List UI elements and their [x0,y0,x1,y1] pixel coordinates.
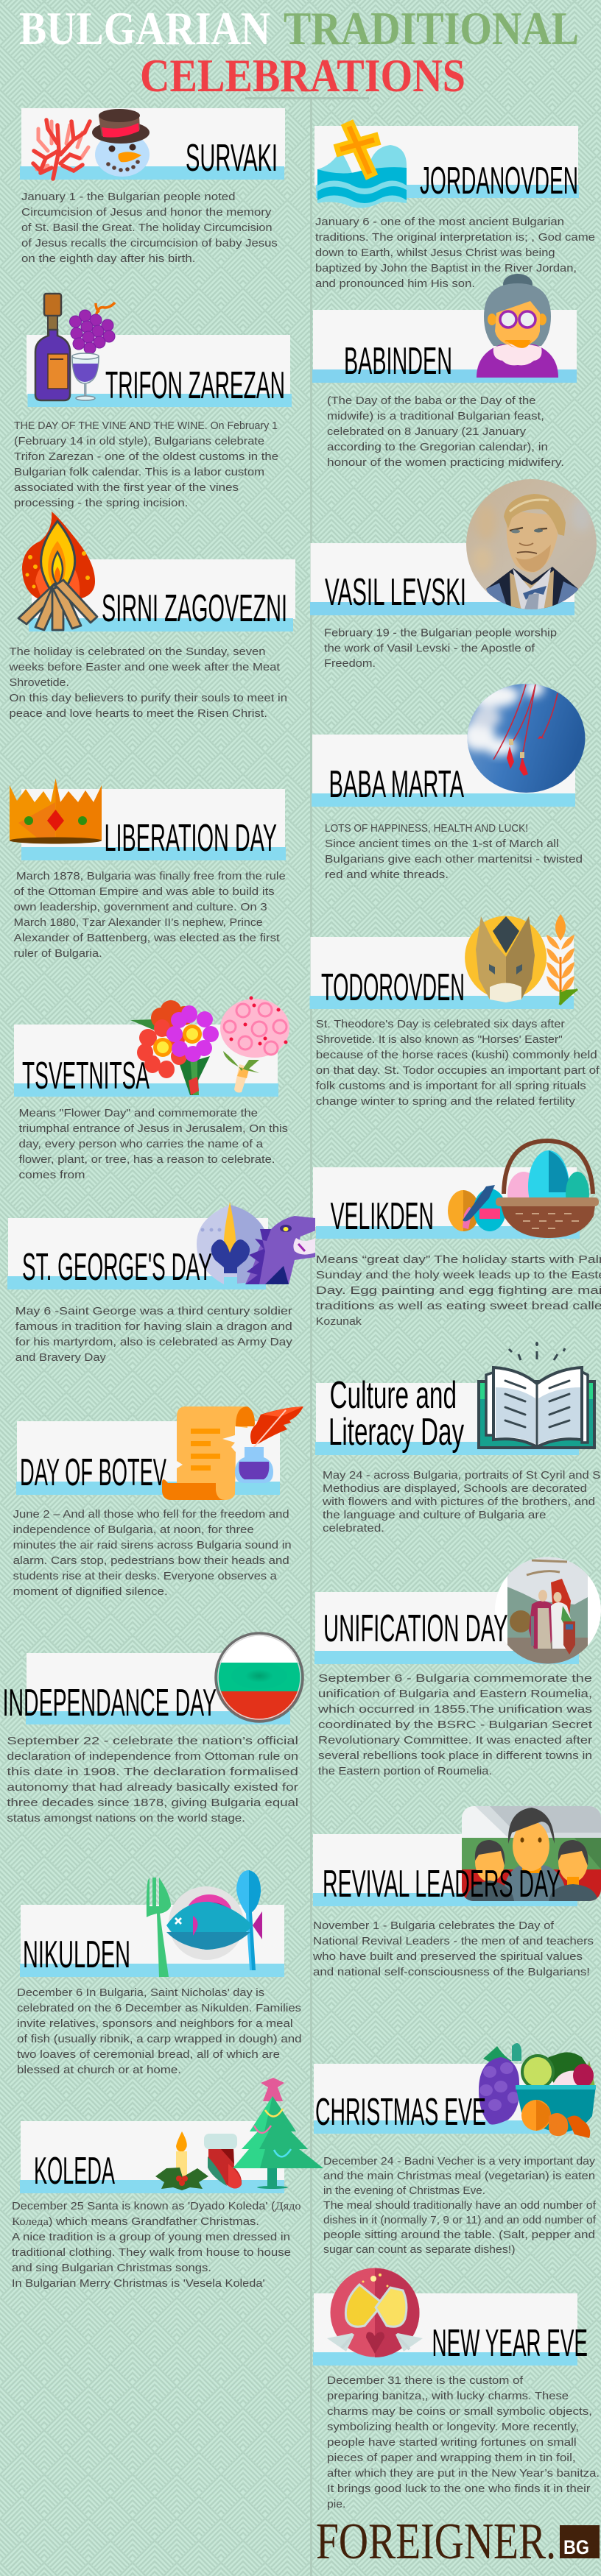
panel: day of botev [13,1406,303,1598]
text block: jordanovden: baptized by John the Baptist in the River Jordan, [315,262,577,275]
heading: day of botev: DAY OF BOTEV [20,1451,166,1494]
text block: new year eve: charms may be coins or small symbolic objects, [327,2405,592,2418]
text block: velikden: Day. Egg painting and egg fighting are main [316,1284,601,1297]
text block: todorovden: on that day. St. Todor occupies an important part of [316,1064,600,1077]
icon: quill and inkwell [235,1406,303,1483]
text block: day of botev: June 2 – And all those who fell for the freedom and [13,1508,289,1521]
text block: todorovden: change winter to spring and the related fertility [316,1095,575,1108]
text block: todorovden [316,1018,600,1108]
text block: jordanovden: and pronounced him His son. [315,277,475,290]
panel: revival leaders day [312,1806,601,1978]
text block: baba marta: red and white threads. [325,868,449,881]
panel: christmas eve [314,2043,597,2256]
text block: new year eve: symbolizing health or longevity. More recently, [327,2421,579,2433]
text block: trifon zarezan: (February 14 in old style), Bulgarians celebrate [14,435,264,447]
text block: survaki: Circumcision of Jesus and honor the memory [21,206,272,219]
text block: koleda: A nice tradition is a group of young men dressed in [12,2231,290,2243]
icon: painted eggs [448,1185,506,1231]
panel: sirni zagovezni [8,512,295,720]
text block: trifon zarezan: THE DAY OF THE VINE AND THE WINE. On February 1 [14,420,278,432]
panel: culture and literacy day [315,1342,601,1535]
text block: new year eve: preparing banitza,, with lucky charms. These [327,2390,569,2402]
icon: coral [33,120,90,179]
icon: scroll [162,1406,255,1500]
text block: velikden: Kozunak [316,1315,362,1328]
text block: tsvetnitsa: day, every person who carries the name of a [19,1138,264,1150]
text block: trifon zarezan: Bulgarian folk calendar. This is a labor custom [14,466,264,478]
heading: velikden: VELIKDEN [331,1195,434,1238]
text block: unification day: unification of Bulgaria and Eastern Roumelia, [318,1688,592,1700]
text block: todorovden: St. Theodore's Day is celebrated six days after [316,1018,565,1030]
heading: nikulden: NIKULDEN [23,1933,130,1976]
text block: unification day [317,1672,593,1777]
text block: tsvetnitsa: comes from [19,1169,85,1181]
panel: unification day [314,1557,601,1777]
heading: sirni zagovezni: SIRNI ZAGOVEZNI [102,587,287,630]
text block: revival leaders day: who have built and preserved the spiritual values [312,1950,583,1963]
text block: koleda: In Bulgarian Merry Christmas is 'Vesela Koleda' [12,2277,265,2290]
text block: survaki: on the eighth day after his birth. [21,252,195,265]
text block: koleda [12,2200,300,2290]
text block: trifon zarezan [14,420,278,509]
text block: todorovden: Shrovetide. It is also known as "Horses' Easter" [316,1033,563,1046]
panel: koleda [12,2078,323,2290]
text block: liberation day: of the Ottoman Empire and was able to build its [14,885,275,898]
text block: st george's day: May 6 -Saint George was a third century soldier [15,1305,292,1317]
text block: christmas eve [323,2155,597,2256]
text block: independance day: this date in 1908. The declaration formalised [7,1766,298,1778]
icon: bonfire [18,512,97,630]
text block: babinden: celebrated on 8 January (21 January [327,425,527,438]
panel: st george's day [7,1202,315,1364]
text block: nikulden: invite relatives, sponsors and neighbors for a meal [17,2017,293,2030]
text block: st george's day [15,1305,292,1364]
icon: wine bottle [35,294,70,400]
text block: baba marta [325,822,583,881]
text block: unification day: several rebellions took place in different towns in [318,1749,592,1762]
text block: tsvetnitsa: flower, plant, or tree, has a reason to celebrate. [19,1153,275,1166]
heading: baba marta: BABA MARTA [328,763,464,806]
icon: wheat [546,914,577,1005]
icon: wine glass [72,353,99,400]
text block: culture and literacy day: with flowers and with pictures of the brothers, and [322,1496,595,1508]
panel: trifon zarezan [14,294,292,509]
text block: koleda: December 25 Santa is known as 'Dyado Koleda' ( Дядо [12,2200,300,2212]
text block: todorovden: folk customs and is important for all spring rituals [316,1080,586,1092]
icon: open book [479,1342,594,1448]
text block: sirni zagovezni: weeks before Easter and one week after the Meat [8,661,281,673]
text block: nikulden [17,1986,302,2076]
icon: martenitsa photo [467,684,585,793]
text block: independance day: three decades since 1878, giving Bulgaria equal [7,1797,298,1809]
icon: champagne glasses [327,2268,423,2357]
panel: babinden [312,274,577,469]
text block: independance day [7,1735,298,1825]
text block: day of botev [13,1508,292,1598]
icon: bulgarian flag badge [214,1631,305,1724]
icon: grapes and vegetable bowl [479,2043,596,2138]
panel: vasil levski [310,478,600,670]
icon: flower bouquets [130,997,289,1095]
icon: crown [10,779,102,843]
text block: sirni zagovezni: On this day believers to purify their souls to meet in [9,692,287,704]
text block: babinden: (The Day of the baba or the Day of the [327,394,536,407]
panel: jordanovden [314,122,595,290]
icon: knight helmet [197,1202,264,1284]
heading: survaki: SURVAKI [186,137,278,180]
logo: foreigner.bg: BG [563,2536,589,2558]
text block: revival leaders day: National Revival Leaders - the men of and teachers [313,1935,594,1947]
text block: todorovden: because of the horse races (kushi) commonly held [316,1049,597,1061]
text block: survaki [21,191,278,265]
text block: day of botev: students rise at their desks. Everyone observes a [13,1570,277,1582]
text block: culture and literacy day: celebrated. [323,1522,384,1535]
text block: velikden: traditions as well as eating sweet bread called [316,1300,601,1312]
text block: koleda: traditional clothing. They walk from house to house [12,2246,291,2259]
text block: vasil levski [324,627,557,670]
icon: grapes [69,302,115,354]
heading: independance day: INDEPENDANCE DAY [3,1682,217,1724]
text block: liberation day: March 1878, Bulgaria was finally free from the rule [16,870,286,882]
panel: nikulden [17,1870,302,2076]
text block: baba marta: Since ancient times on the 1-st of March all [325,838,559,850]
panel: tsvetnitsa [14,997,289,1181]
icon: egg basket [496,1141,599,1238]
text block: liberation day: own leadership, government and culture. On 3 [14,901,267,913]
text block: culture and literacy day: Methodius are displayed, Schools are decorated [323,1482,587,1495]
text block: survaki: January 1 - the Bulgarian people noted [21,191,236,203]
heading: koleda: KOLEDA [34,2150,115,2193]
text block: christmas eve: in the evening of Christmas Eve. [323,2184,485,2197]
heading: vasil levski: VASIL LEVSKI [325,571,466,614]
icon: fish on a plate with cutlery [147,1870,262,1977]
text block: independance day: autonomy that had already basically existed for [7,1781,298,1794]
icon: dragon [245,1216,315,1284]
text block: new year eve: people have started writing fortunes on small [327,2436,577,2449]
text block: velikden: Sunday and the holy week leads up to the Easter [316,1269,601,1281]
text block: trifon zarezan: Trifon Zarezan - one of the oldest customs in the [14,450,278,463]
text block: jordanovden [315,216,595,290]
text block: koleda: Коледа ) which means Grandfather Christmas. [12,2215,259,2228]
title: CELEBRATIONS [140,50,465,102]
text block: christmas eve: sugar can count as separate dishes!) [323,2243,516,2256]
text block: liberation day [14,870,286,960]
text block: day of botev: alarm. Cars stop, pedestrians bow their heads and [13,1554,289,1567]
panel: velikden [313,1141,601,1328]
text block: nikulden: blessed at church or at home. [17,2064,181,2076]
text block: velikden: Means “great day” The holiday starts with Palm [316,1253,601,1266]
text block: unification day: coordinated by the BSRC - Bulgarian Secret [318,1719,593,1731]
text block: independance day: status amongst nations on the world stage. [7,1812,245,1825]
text block: christmas eve: people sitting around the table. (Salt, pepper and [323,2229,595,2241]
text block: revival leaders day: November 1 - Bulgaria celebrates the Day of [313,1919,555,1932]
text block: vasil levski: February 19 - the Bulgarian people worship [324,627,557,639]
panel: todorovden [309,914,600,1108]
text block: trifon zarezan: associated with the first year of the vines [14,481,239,494]
text block: velikden [316,1253,601,1328]
text block: baba marta: Bulgarians give each other martenitsi - twisted [325,853,583,866]
text block: culture and literacy day: the language and culture of Bulgaria are [323,1509,546,1521]
heading: culture and literacy day [328,1374,464,1454]
text block: independance day: declaration of independence from Ottoman rule on [7,1750,298,1763]
text block: trifon zarezan: processing - the spring incision. [14,497,189,509]
panel: liberation day [10,779,286,960]
text block: sirni zagovezni [8,645,287,720]
text block: babinden: midwife) is a traditional Bulgarian feast, [327,410,544,422]
text block: koleda: and sing Bulgarian Christmas songs. [12,2262,211,2274]
heading: tsvetnitsa: TSVETNITSA [22,1055,150,1097]
text block: babinden: according to the Gregorian calendar), in [327,441,548,453]
text block: unification day: the Eastern portion of Roumelia. [318,1765,492,1777]
text block: vasil levski: Freedom. [324,657,376,670]
heading: todorovden: TODOROVDEN [321,966,465,1009]
text block: day of botev: independence of Bulgaria, at noon, for three [13,1524,254,1536]
icon: revival leaders on flag [462,1806,601,1901]
text block: nikulden: of fish (usually ribnik, a carp wrapped in dough) and [17,2033,302,2045]
title [19,3,579,102]
text block: christmas eve: December 24 - Badni Vecher is a very important day [323,2155,596,2168]
text block: liberation day: March 1880, Tzar Alexander II’s nephew, Prince [14,916,263,929]
heading: culture and literacy day: Literacy Day [328,1411,464,1454]
text block: tsvetnitsa [19,1107,288,1181]
heading: trifon zarezan: TRIFON ZAREZAN [105,364,285,407]
text block: jordanovden: traditions. The original interpretation is; , God came [315,231,595,244]
text block: nikulden: two loaves of ceremonial bread, all of which are [17,2048,280,2061]
text block: new year eve: pieces of paper and wrapping them in tin foil, [327,2452,576,2464]
heading: babinden: BABINDEN [344,340,452,383]
icon: cross in waves [317,122,407,208]
panel: baba marta [312,679,589,881]
text block: new year eve [327,2374,600,2510]
text block: unification day: September 6 - Bulgaria commemorate the [318,1672,592,1685]
text block: unification day: which occurred in 1855.The unification was [317,1703,592,1716]
text block: day of botev: minutes the air raid sirens across Bulgaria sound in [13,1539,292,1551]
text block: survaki: of Jesus recalls the circumcision of baby Jesus [21,237,278,250]
text block: survaki: of St. Basil the Great. The holiday Circumcision [21,222,273,234]
text block: st george's day: for his martyrdom, also is celebrated as Army Day [15,1336,292,1348]
text block: babinden: honour of the women practicing midwifery. [327,456,564,469]
text block: new year eve: It brings good luck to the one who finds it in their [327,2483,590,2495]
text block: sirni zagovezni: Shrovetide. [9,676,69,689]
text block: new year eve: pie. [327,2498,345,2510]
icon: snowman [92,109,150,177]
text block: st george's day: famous in tradition for having slain a dragon and [15,1320,292,1333]
title: BULGARIAN [19,3,270,54]
text block: culture and literacy day: May 24 - across Bulgaria, portraits of St Cyril and St [323,1469,601,1482]
text block: tsvetnitsa: triumphal entrance of Jesus in Jerusalem, On this [19,1122,288,1135]
text block: nikulden: December 6 In Bulgaria, Saint Nicholas' day is [17,1986,264,1999]
icon: christmas stocking [204,2134,242,2189]
text block: day of botev: moment of dignified silence. [13,1585,168,1598]
heading: liberation day: LIBERATION DAY [105,817,277,860]
heading: st george's day: ST. GEORGE'S DAY [22,1246,212,1289]
text block: new year eve: December 31 there is the custom of [327,2374,524,2387]
panel: new year eve [313,2268,600,2510]
text block: tsvetnitsa: Means "Flower Day" and commemorate the [19,1107,258,1119]
text block: revival leaders day: and national self-consciousness of the Bulgarians! [313,1966,590,1978]
icon: unification illustration [495,1557,601,1665]
panel: independance day [3,1631,305,1825]
text block: liberation day: ruler of Bulgaria. [14,947,102,960]
text block: jordanovden: down to Earth, whilst Jesus Christ was being [315,247,555,259]
text block: babinden [327,394,564,469]
text block: baba marta: LOTS OF HAPPINESS, HEALTH AND LUCK! [325,822,528,835]
text block: independance day: September 22 - celebrate the nation’s official [7,1735,298,1747]
text block: vasil levski: the work of Vasil Levski - the Apostle of [324,642,535,655]
text block: new year eve: after which they are put in the New Year’s banitza. [327,2467,600,2480]
text block: liberation day: Alexander of Battenberg, was elected as the first [14,932,281,944]
panel: survaki [20,108,285,265]
text block: revival leaders day [312,1919,594,1978]
text block: st george's day: and Bravery Day [15,1351,106,1364]
text block: nikulden: celebrated on the 6 December as Nikulden. Families [17,2002,301,2014]
text block: culture and literacy day [322,1469,601,1535]
icon: grandmother [477,274,558,378]
text block: christmas eve: and the main Christmas meal (vegetarian) is eaten [323,2170,595,2182]
heading: culture and literacy day: Culture and [330,1374,457,1417]
icon: horse head [465,916,546,1002]
text block: christmas eve: The meal should traditionally have an odd number of [323,2199,597,2212]
text block: sirni zagovezni: The holiday is celebrated on the Sunday, seven [9,645,265,658]
text block: sirni zagovezni: peace and love hearts to meet the Risen Christ. [9,707,267,720]
text block: christmas eve: dishes in it (normally 7, 9 or 11) and an odd number of [323,2214,597,2226]
text block: unification day: Revolutionary Committee. It was enacted after [318,1734,592,1747]
icon: portrait of Levski [464,478,600,611]
icon: candle and holly [155,2131,208,2190]
text block: jordanovden: January 6 - one of the most ancient Bulgarian [315,216,564,228]
icon: christmas tree [233,2078,323,2189]
